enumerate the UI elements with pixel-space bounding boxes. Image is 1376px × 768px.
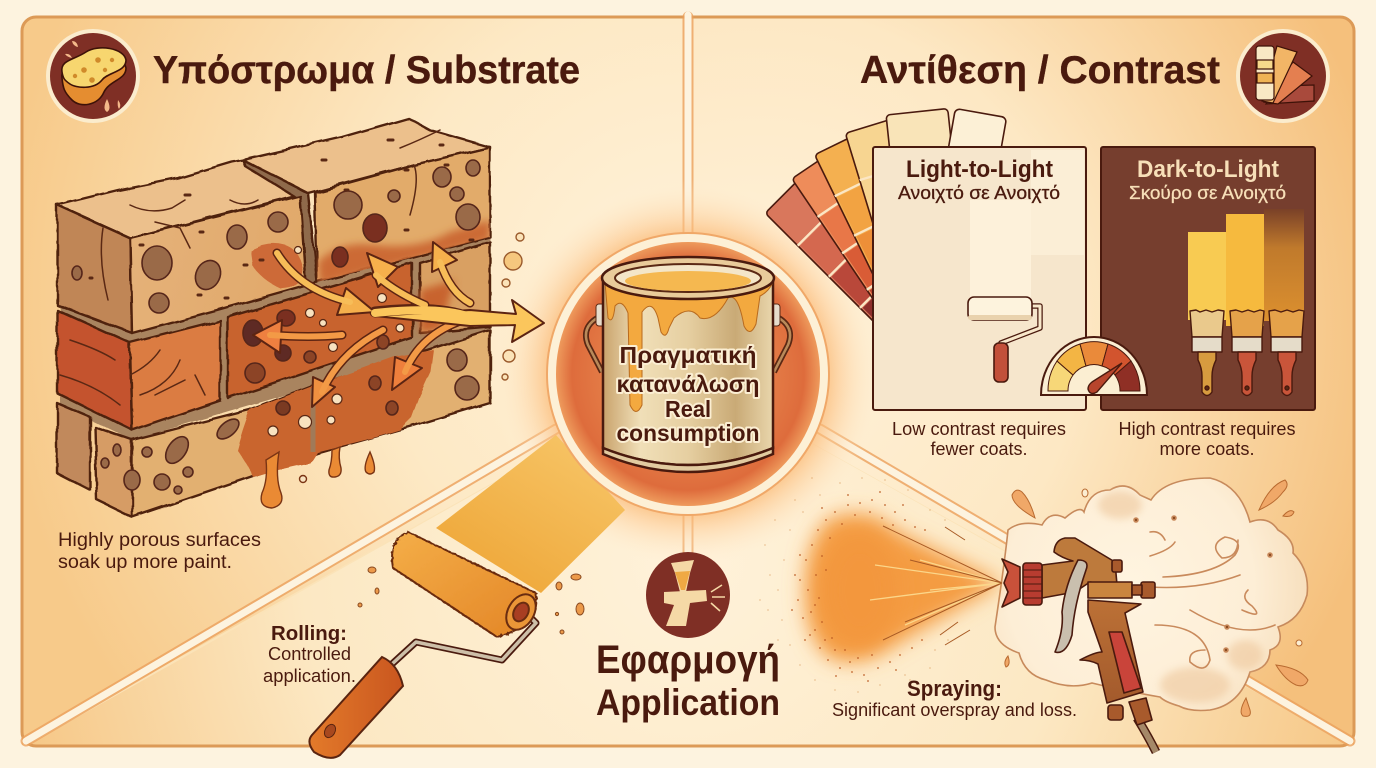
panel: light-to-light: [873, 147, 1086, 410]
caption: rolling: application.: [263, 666, 356, 686]
colour swatch fan: [765, 109, 1007, 369]
caption: spraying: Spraying:: [907, 676, 1002, 701]
heading: dark-to-light: Dark-to-Light: [1137, 156, 1279, 183]
can rim: [602, 257, 774, 299]
swatch card 3: [815, 134, 959, 363]
gauge needle: [1088, 363, 1122, 393]
heading: application: [596, 552, 780, 723]
icon: colour fan deck: [1236, 29, 1330, 123]
trigger: [1055, 560, 1087, 652]
paint strip: first coat: [1188, 232, 1226, 320]
swatch card 5: [886, 109, 973, 354]
absorption arrows: [253, 242, 544, 407]
hose fitting: [1129, 698, 1152, 725]
caption: low contrast: fewer coats.: [930, 438, 1028, 459]
cloud droplets: [1005, 480, 1308, 716]
wet paint stain: [237, 220, 490, 477]
gun grip: [1080, 600, 1143, 703]
caption: rolling: Rolling:: [271, 623, 347, 645]
heading: contrast: [860, 29, 1330, 123]
icon: brush 3: [1269, 310, 1304, 396]
swatch card 6: [913, 109, 1007, 356]
swatch card 1: [765, 179, 955, 369]
roller frame: [392, 607, 536, 664]
paint drips on can: [605, 282, 772, 412]
caption: substrate: Highly porous surfaces: [58, 530, 261, 551]
icon: paint roller: [968, 297, 1040, 382]
label: real consumption: [616, 342, 760, 446]
loose droplets: [502, 233, 524, 380]
label: real consumption: Πραγματική: [620, 342, 756, 368]
paint strip: third coat: [1264, 209, 1304, 321]
circular centre glow: [493, 179, 883, 569]
swatch card 2: [792, 152, 957, 365]
nozzle cap: [1002, 559, 1020, 607]
caption: low contrast: [892, 418, 1066, 459]
roller cover: [392, 532, 542, 637]
icon: brush 1: [1190, 310, 1224, 396]
paint flecks: [358, 567, 584, 634]
hose: [1137, 718, 1156, 752]
wall blocks: [57, 118, 490, 517]
roller handle: [309, 657, 403, 758]
caption: spraying: [832, 676, 1077, 720]
illustration: spray fan: [760, 478, 1002, 692]
label: real consumption: κατανάλωση: [616, 371, 760, 397]
caption: high contrast: High contrast requires: [1118, 418, 1296, 439]
caption: high contrast: more coats.: [1160, 438, 1254, 459]
illustration: overspray cloud: [995, 478, 1308, 716]
icon: paint can: [586, 257, 790, 472]
subheading: Σκούρο σε Ανοιχτό: Σκούρο σε Ανοιχτό: [1129, 182, 1286, 203]
rolled paint stripe: [436, 435, 625, 593]
cloud swirls: [1134, 516, 1275, 668]
wall cracks: [60, 130, 440, 405]
title: Υπόστρωμα / Substrate: Υπόστρωμα / Substrate: [153, 49, 580, 92]
caption: spraying: Significant overspray and loss.: [832, 700, 1077, 720]
illustration: paint roller: [309, 532, 584, 758]
caption: substrate: soak up more paint.: [58, 552, 232, 573]
icon: spray gun badge: [646, 552, 730, 638]
spray rays: [870, 560, 1002, 625]
gun body: [1042, 538, 1117, 598]
icon: contrast gauge: [1041, 337, 1147, 395]
illustration: porous brick wall: [57, 118, 544, 573]
title: Εφαρμογή Application: Εφαρμογή: [596, 638, 780, 682]
icon: spray gun: [1002, 538, 1156, 752]
title: Εφαρμογή Application: [596, 638, 780, 723]
pores: [72, 160, 480, 494]
spray speckle: [792, 492, 925, 681]
subheading: Ανοιχτό σε Ανοιχτό: Ανοιχτό σε Ανοιχτό: [898, 182, 1060, 203]
small pores and bubbles: [90, 140, 473, 436]
light paint stripe: [970, 200, 1031, 300]
caption: substrate: [58, 530, 261, 573]
title: Εφαρμογή Application: Application: [596, 682, 780, 723]
label: real consumption: consumption: [616, 420, 760, 446]
paint drips: [261, 447, 374, 508]
panel: dark-to-light: [1101, 147, 1315, 410]
heading: substrate: [46, 29, 580, 123]
caption: rolling: [263, 623, 356, 686]
paint strip: second coat: [1226, 214, 1264, 326]
caption: rolling: Controlled: [268, 644, 351, 664]
label: real consumption: Real: [665, 396, 711, 422]
cloud shading: [1098, 491, 1263, 703]
caption: high contrast: [1118, 418, 1296, 459]
icon: sponge: [46, 29, 140, 123]
central badge: paint can: [546, 232, 830, 516]
title: Αντίθεση / Contrast: Αντίθεση / Contrast: [860, 49, 1220, 92]
caption: low contrast: Low contrast requires: [892, 418, 1066, 439]
heading: light-to-light: Light-to-Light: [906, 156, 1053, 183]
swatch card 4: [845, 119, 960, 359]
icon: brush 2: [1230, 310, 1264, 396]
